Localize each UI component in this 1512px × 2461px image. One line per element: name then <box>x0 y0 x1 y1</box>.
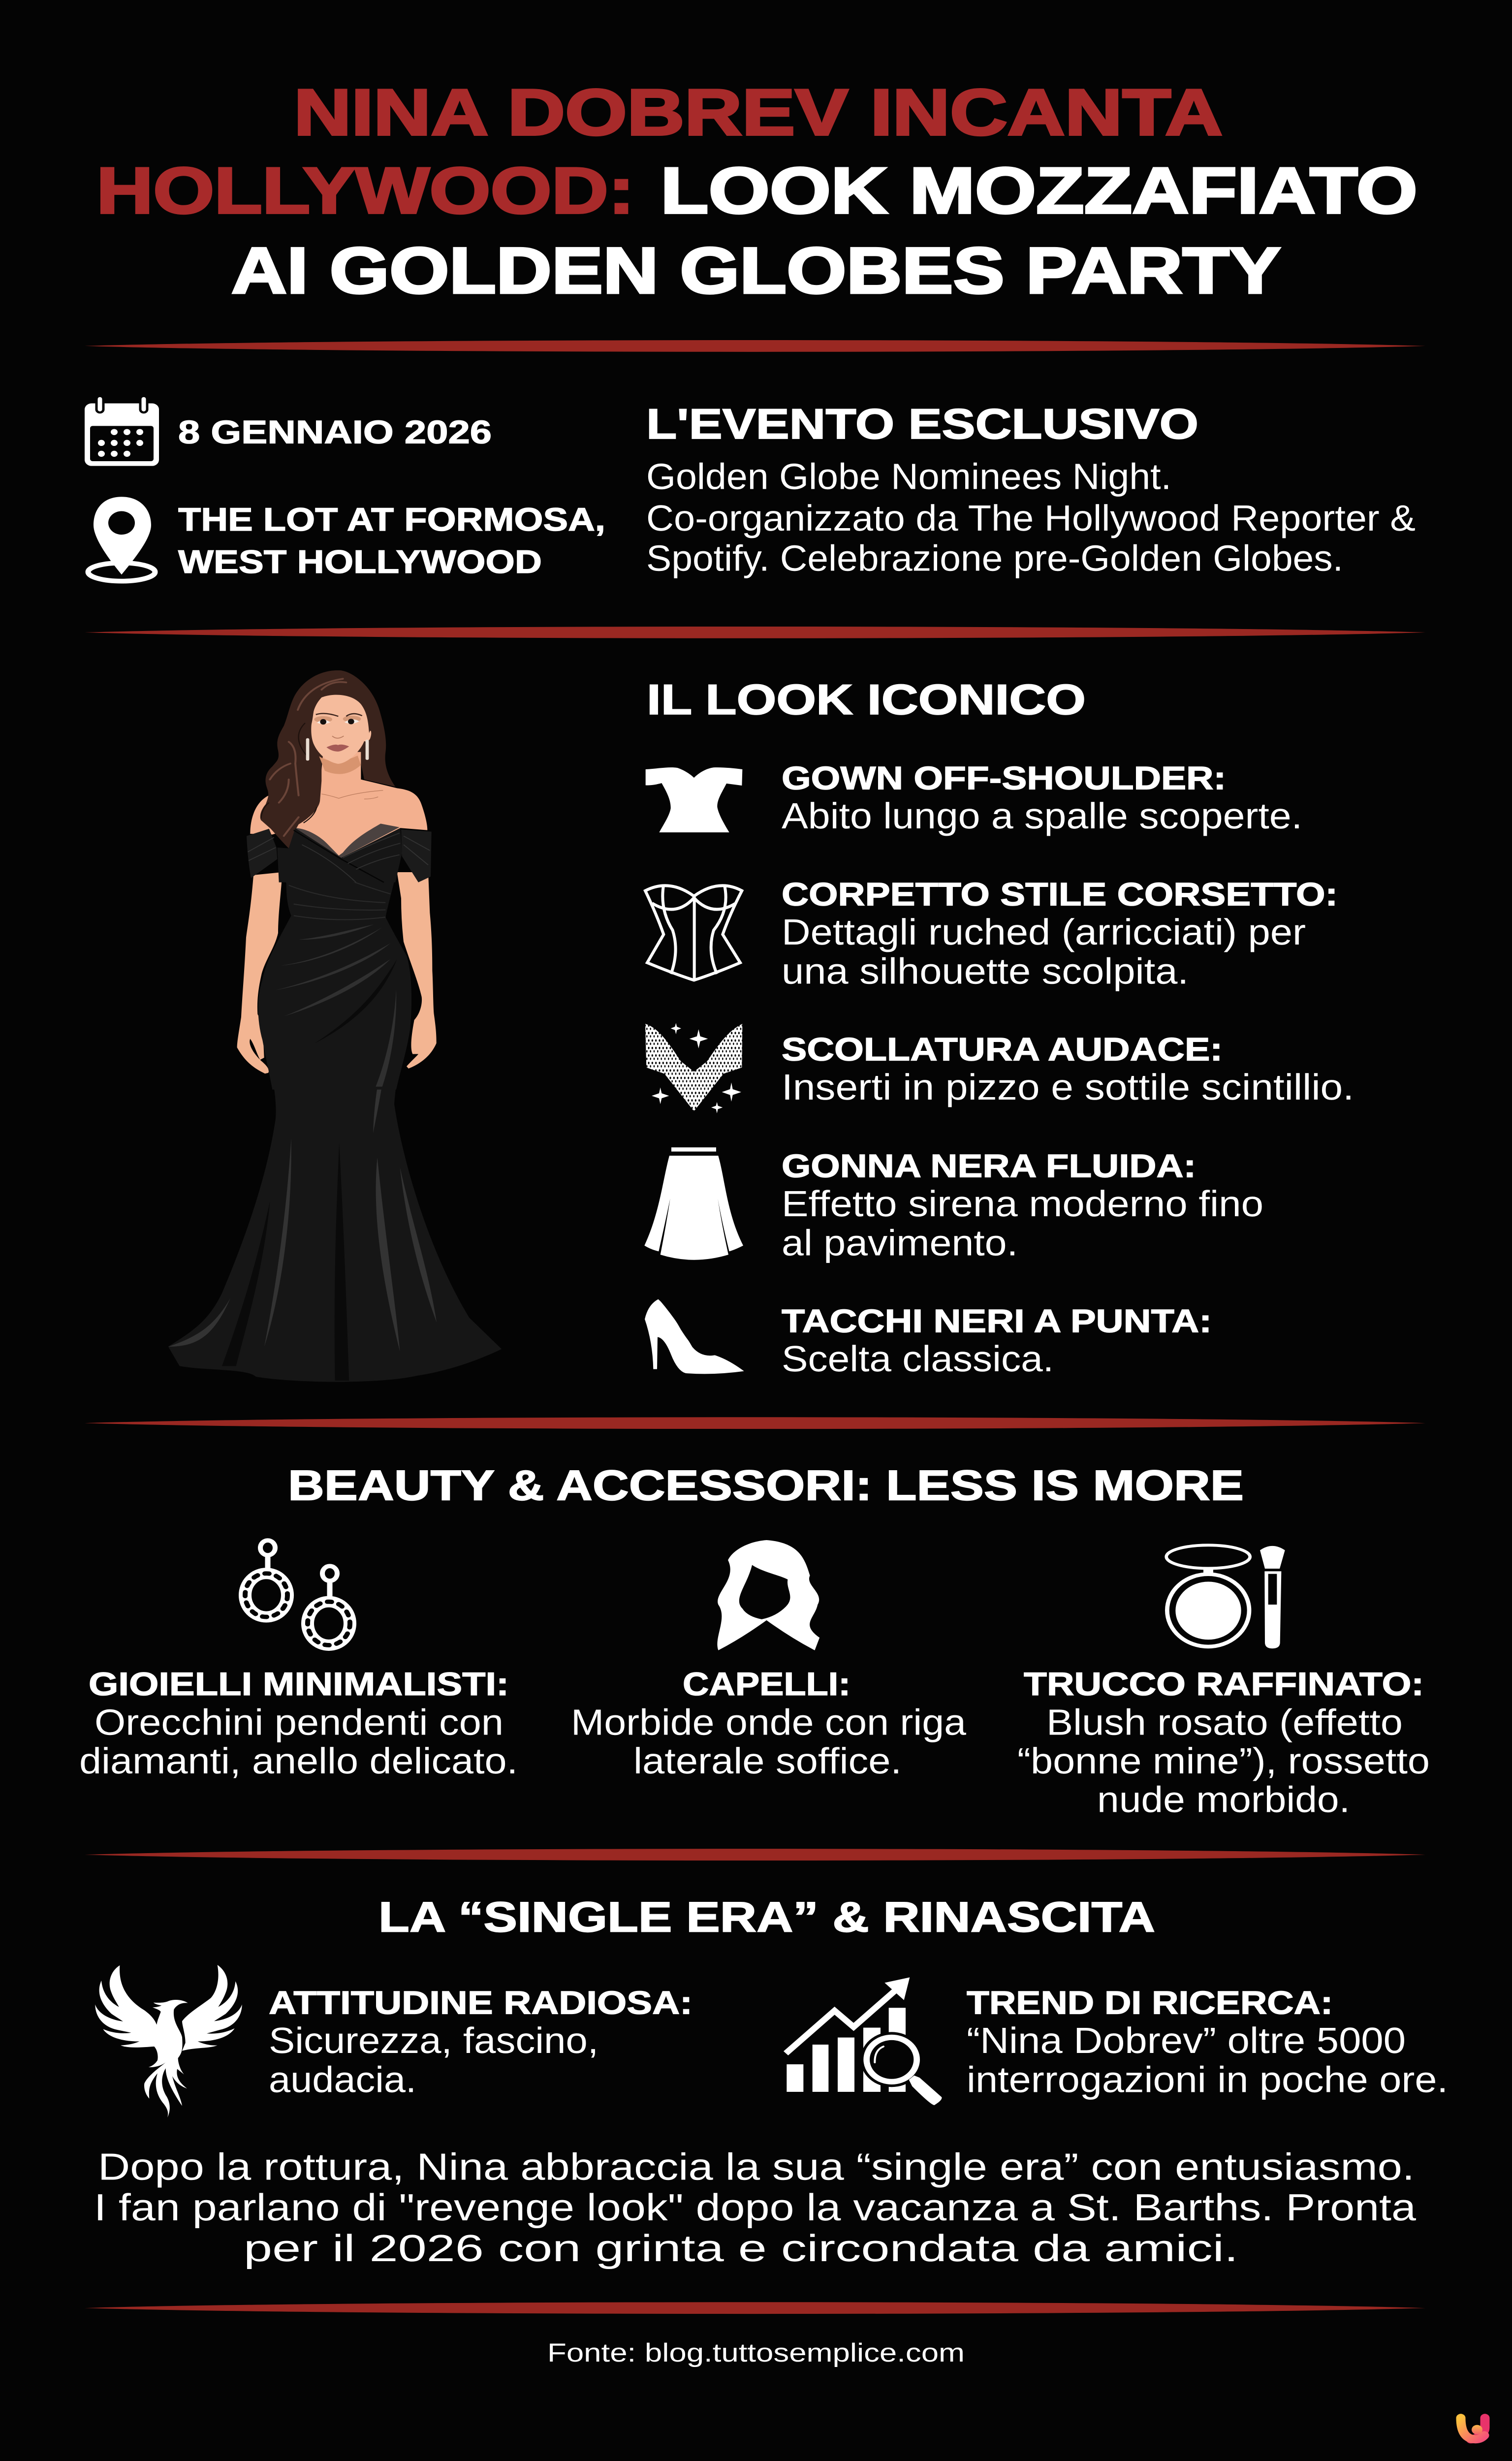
hair back <box>260 670 395 848</box>
date text: 8 GENNAIO 2026 <box>178 414 492 450</box>
closing paragraph: per il 2026 con grinta e circondata da amici. <box>244 2227 1238 2270</box>
item: gown: Abito lungo a spalle scoperte. <box>782 795 1302 836</box>
arms and gown torso <box>237 865 437 1090</box>
right sleeve <box>401 829 432 883</box>
place text: THE LOT AT FORMOSA, <box>178 501 605 537</box>
makeup text: nude morbido. <box>1097 1779 1350 1820</box>
collarbones <box>321 790 383 799</box>
icon: calendar <box>85 396 159 466</box>
gown torso folds <box>289 869 390 920</box>
arm left <box>237 872 282 1073</box>
event description <box>646 456 1416 578</box>
heading: LA “SINGLE ERA” & RINASCITA <box>378 1893 1155 1941</box>
hair dark lines <box>261 723 316 823</box>
item: skirt: GONNA NERA FLUIDA: <box>782 1147 1196 1184</box>
skin: neck, shoulders and chest <box>250 752 427 858</box>
panel: l'evento esclusivo <box>646 400 1416 578</box>
item: heels: TACCHI NERI A PUNTA: <box>782 1303 1212 1339</box>
item: heels: Scelta classica. <box>782 1338 1054 1379</box>
neck shadow <box>319 756 361 774</box>
item: corset <box>782 876 1338 991</box>
jewels text: diamanti, anello delicato. <box>79 1740 518 1781</box>
gown torso highlights <box>275 924 396 1087</box>
gown torso <box>258 865 411 1090</box>
panel: beauty e accessori <box>79 1461 1430 1820</box>
illustration: Nina Dobrev in black gown <box>168 670 502 1382</box>
attitude text <box>269 1984 693 2100</box>
item: corset: Dettagli ruched (arricciati) per <box>782 912 1306 952</box>
sleeve folds <box>248 836 430 865</box>
hair highlights <box>270 679 346 836</box>
icon: high heel <box>645 1299 744 1374</box>
title: HOLLYWOOD: <box>96 154 634 227</box>
eye shadow and brows <box>314 714 362 723</box>
lace <box>295 823 400 858</box>
jewels text: Orecchini pendenti con <box>94 1702 504 1742</box>
jewels text: GIOIELLI MINIMALISTI: <box>89 1666 509 1702</box>
item: gown <box>782 760 1302 836</box>
item: heels <box>782 1303 1212 1379</box>
icon: corset <box>645 884 742 980</box>
item: neckline <box>782 1031 1354 1107</box>
gown bodice and sleeves <box>247 823 432 883</box>
item: skirt <box>782 1147 1263 1263</box>
item: gown: GOWN OFF-SHOULDER: <box>782 760 1226 796</box>
item: neckline: Inserti in pizzo e sottile scintillio. <box>782 1067 1354 1107</box>
lips <box>326 745 349 752</box>
event description: Co-organizzato da The Hollywood Reporter & <box>646 498 1416 538</box>
makeup text: “bonne mine”), rossetto <box>1017 1740 1430 1781</box>
hair text <box>571 1666 966 1781</box>
jewels text <box>79 1666 518 1781</box>
makeup text: TRUCCO RAFFINATO: <box>1024 1666 1424 1702</box>
event date and place <box>85 396 605 581</box>
icon: hair <box>717 1540 819 1650</box>
panel: single era <box>94 1893 1448 2270</box>
attitude text: ATTITUDINE RADIOSA: <box>269 1984 693 2020</box>
upper body and head <box>250 670 427 858</box>
icon: location pin <box>88 497 155 581</box>
item: corset: una silhouette scolpita. <box>782 950 1189 991</box>
arm right <box>397 872 437 1069</box>
heading: L'EVENTO ESCLUSIVO <box>646 400 1198 448</box>
place text: WEST HOLLYWOOD <box>178 543 542 580</box>
item: neckline: SCOLLATURA AUDACE: <box>782 1031 1223 1068</box>
event description: Golden Globe Nominees Night. <box>646 456 1171 497</box>
earrings <box>306 738 369 760</box>
nose <box>332 736 344 738</box>
hair text: Morbide onde con riga <box>571 1702 966 1742</box>
title: LOOK MOZZAFIATO <box>661 154 1418 227</box>
heading: IL LOOK ICONICO <box>647 675 1086 723</box>
item: skirt: al pavimento. <box>782 1222 1018 1263</box>
icon: earrings <box>245 1541 350 1645</box>
closing paragraph <box>94 2146 1417 2270</box>
title <box>96 76 1418 307</box>
bodice wrap folds <box>294 830 400 883</box>
title: NINA DOBREV INCANTA <box>294 76 1223 149</box>
gown lower skirt <box>168 1046 502 1382</box>
hair over shoulder <box>260 743 321 848</box>
hair text: CAPELLI: <box>683 1666 850 1702</box>
makeup text: Blush rosato (effetto <box>1046 1702 1403 1742</box>
trend text: “Nina Dobrev” oltre 5000 <box>967 2020 1406 2061</box>
closing paragraph: Dopo la rottura, Nina abbraccia la sua “single era” con entusiasmo. <box>98 2146 1415 2188</box>
attitude text: Sicurezza, fascino, <box>269 2020 598 2061</box>
icon: trend chart with magnifier <box>786 1977 942 2105</box>
icon: phoenix <box>95 1965 242 2117</box>
makeup text <box>1017 1666 1430 1820</box>
icon: off-shoulder top <box>646 767 742 832</box>
title: AI GOLDEN GLOBES PARTY <box>231 234 1281 307</box>
place text <box>178 501 605 580</box>
closing paragraph: I fan parlano di "revenge look" dopo la vacanza a St. Barths. Pronta <box>94 2186 1417 2229</box>
trend text: TREND DI RICERCA: <box>967 1984 1333 2020</box>
item: skirt: Effetto sirena moderno fino <box>782 1183 1263 1224</box>
attitude text: audacia. <box>269 2059 416 2100</box>
hair text: laterale soffice. <box>633 1740 902 1781</box>
panel: il look iconico <box>644 675 1354 1379</box>
item: corset: CORPETTO STILE CORSETTO: <box>782 876 1338 913</box>
face <box>311 695 371 764</box>
hair top sweep <box>285 670 371 746</box>
icon: lace neckline <box>645 1023 742 1113</box>
trend text: interrogazioni in poche ore. <box>967 2059 1448 2100</box>
bodice <box>277 828 402 883</box>
source line: Fonte: blog.tuttosemplice.com <box>547 2338 965 2367</box>
eyes <box>317 719 359 725</box>
left sleeve <box>247 829 277 878</box>
icon: skirt <box>644 1147 743 1260</box>
trend text <box>967 1984 1448 2100</box>
heading: BEAUTY & ACCESSORI: LESS IS MORE <box>288 1461 1244 1509</box>
icon: brand logo <box>1461 2418 1485 2439</box>
event description: Spotify. Celebrazione pre-Golden Globes. <box>646 537 1343 578</box>
icon: makeup compact and brush <box>1166 1545 1285 1648</box>
